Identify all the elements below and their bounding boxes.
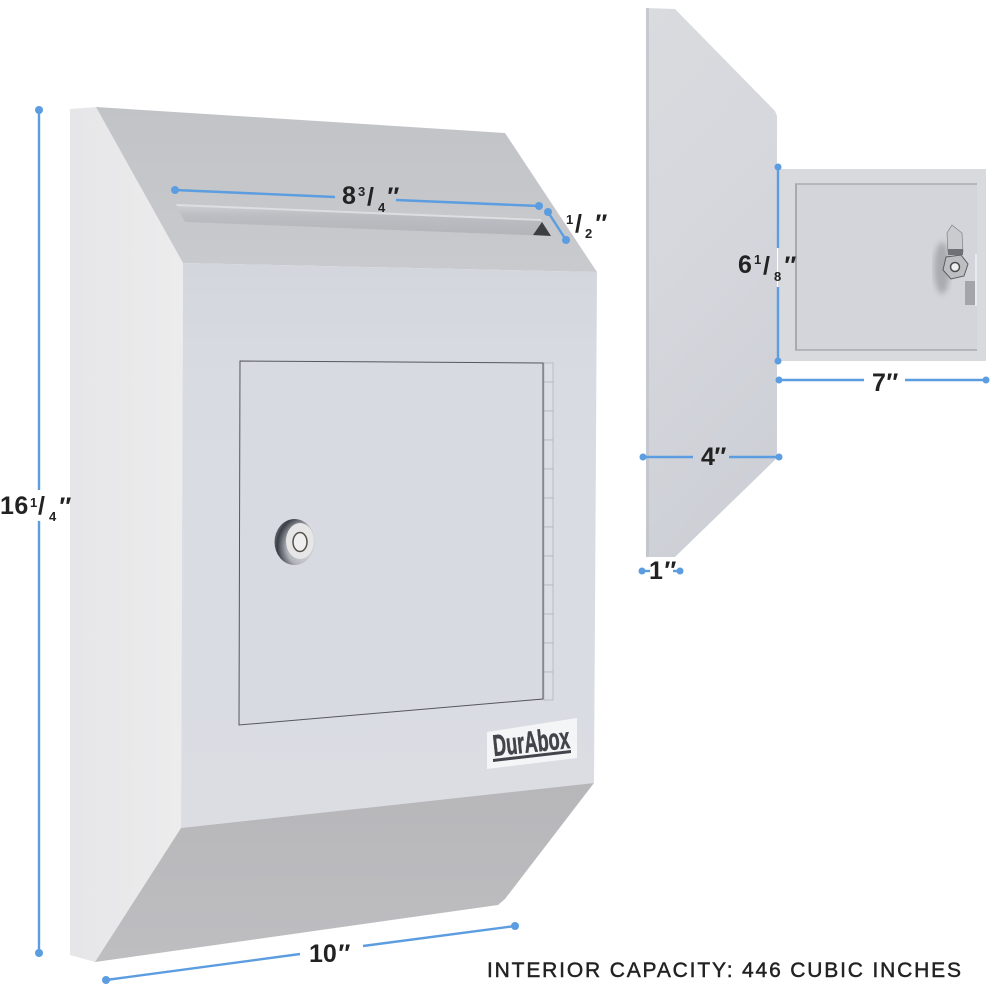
dimension: slot width 8 3/4 inches: /	[367, 183, 374, 211]
dimension: height 16 1/4 inches	[0, 106, 71, 957]
dimension: door width 7 inches	[776, 369, 990, 397]
dimension: width 10 inches	[102, 922, 519, 984]
bottom sloped face	[95, 783, 594, 962]
side panel left edge	[646, 8, 649, 557]
door inner recess	[795, 184, 977, 350]
dimension: height 16 1/4 inches: ″	[58, 493, 71, 521]
capacity caption: INTERIOR CAPACITY: 446 CUBIC INCHES	[487, 959, 961, 982]
mailbox: front view	[70, 107, 597, 962]
top sloped face	[96, 107, 597, 272]
brand label	[487, 718, 577, 769]
dimension: door width 7 inches: ″	[885, 369, 898, 397]
dimension: slot height 1/2 inch	[544, 208, 607, 244]
mail slot	[176, 204, 551, 236]
dimension: slot width 8 3/4 inches: 4	[378, 200, 386, 215]
dimension: depth 4 inches: ″	[713, 443, 726, 471]
dimension: slot width 8 3/4 inches	[171, 182, 543, 215]
dimension: slot height 1/2 inch: 2	[585, 226, 592, 241]
dimension: width 10 inches: ″	[337, 940, 350, 968]
dimension: door height 6 1/8 inches: 6	[738, 251, 752, 279]
dimension: width 10 inches: 10	[309, 940, 337, 968]
dimension: door height 6 1/8 inches: /	[763, 252, 770, 280]
cam lock and latch	[934, 225, 976, 306]
dimension: height 16 1/4 inches: 1	[30, 495, 37, 510]
dimension: depth 4 inches: 4	[701, 443, 715, 471]
dimension: edge depth 1 inch: ″	[663, 557, 676, 585]
dimension: door height 6 1/8 inches: 8	[774, 269, 781, 284]
dimension: slot height 1/2 inch: ″	[594, 210, 607, 238]
dimension: depth 4 inches	[640, 443, 782, 471]
dimension: edge depth 1 inch	[638, 557, 684, 585]
dimension: slot height 1/2 inch: /	[575, 210, 582, 238]
mailbox: side view	[646, 8, 986, 557]
front face	[181, 263, 597, 828]
door key lock	[274, 519, 314, 565]
dimension: height 16 1/4 inches: 4	[49, 509, 57, 524]
dimension: edge depth 1 inch: 1	[649, 557, 663, 585]
dimension: slot width 8 3/4 inches: ″	[386, 183, 399, 211]
dimension: door width 7 inches: 7	[872, 369, 886, 397]
dimension: door height 6 1/8 inches: ″	[783, 252, 796, 280]
dimension: slot width 8 3/4 inches: 3	[358, 184, 365, 199]
dimension: height 16 1/4 inches: /	[38, 492, 45, 520]
left side panel	[70, 107, 183, 962]
access door	[239, 361, 543, 725]
side panel body	[646, 8, 777, 557]
open door plate	[778, 169, 986, 361]
brand label: DurAbox	[491, 722, 571, 763]
dimension: height 16 1/4 inches: 16	[0, 492, 29, 520]
dimension: slot height 1/2 inch: 1	[566, 212, 573, 227]
dimension: slot width 8 3/4 inches: 8	[342, 182, 356, 210]
door hinge	[544, 363, 553, 700]
dimension: door height 6 1/8 inches: 1	[754, 252, 761, 267]
dimension: door height 6 1/8 inches	[738, 164, 796, 364]
